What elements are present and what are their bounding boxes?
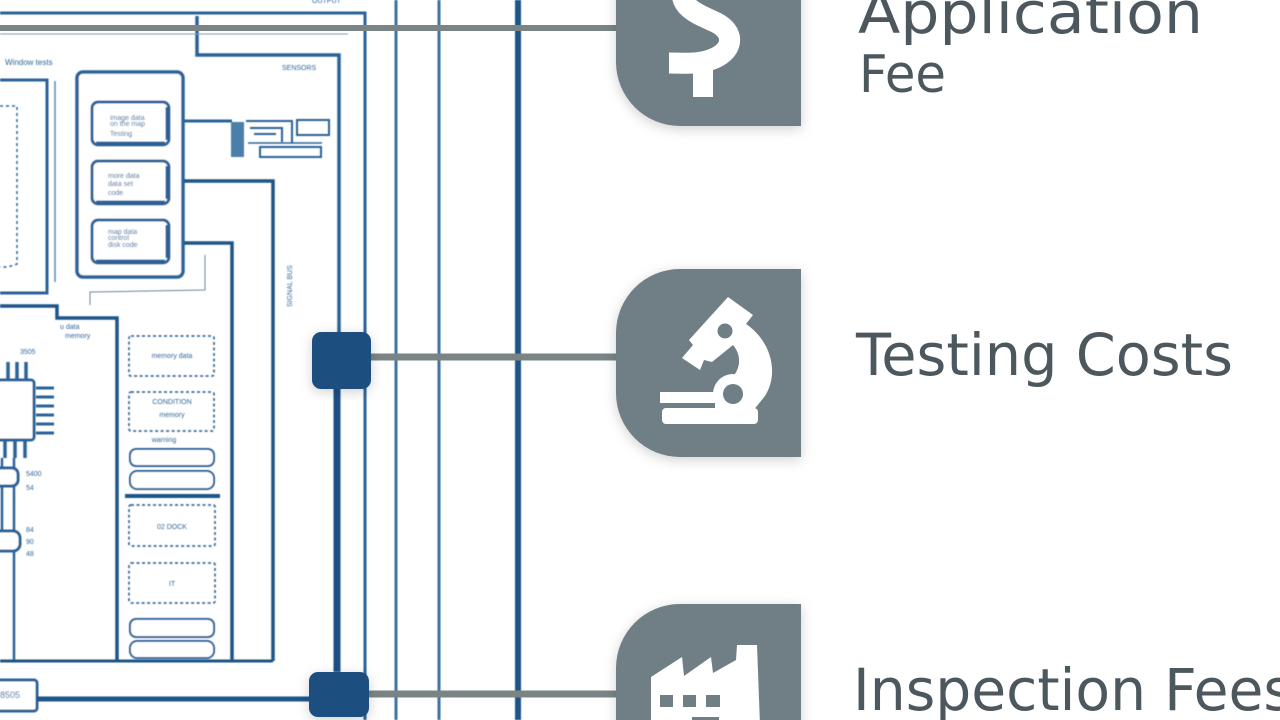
memory block captions: warning — [151, 437, 176, 444]
card 2: code — [108, 190, 123, 197]
memory block captions: memory — [159, 412, 185, 419]
processor chip: 84 — [26, 527, 34, 534]
node connector trunk — [334, 388, 340, 672]
memory block captions: 02 DOCK — [157, 524, 187, 531]
memory block captions — [151, 353, 193, 588]
icon panel: inspection fees — [616, 604, 801, 720]
processor chip — [0, 324, 91, 660]
junction node upper — [312, 332, 371, 389]
controller module with three cards — [77, 72, 183, 277]
label: testing costs: Testing Costs — [855, 321, 1233, 389]
card 2: data set — [108, 181, 133, 188]
grey connector lines — [0, 28, 616, 694]
outer wiring and vertical buses — [0, 0, 518, 720]
card 1: Testing — [110, 131, 132, 138]
card 1: image data — [110, 115, 145, 122]
processor chip: 3505 — [20, 349, 36, 356]
left module frame: Window tests — [5, 58, 53, 67]
circuit schematic — [0, 0, 518, 720]
junction node lower — [309, 672, 369, 717]
processor chip: 90 — [26, 539, 34, 546]
icon panel: testing costs — [616, 269, 801, 457]
card 3: disk code — [108, 242, 138, 249]
card 1: on the map — [110, 121, 145, 128]
icon: dollar sign — [669, 0, 730, 97]
processor chip: 5400 — [26, 471, 42, 478]
left module frame: SENSORS — [282, 65, 317, 72]
memory block captions: IT — [169, 581, 176, 588]
icon: microscope — [660, 297, 772, 424]
card 2: more data — [108, 173, 140, 180]
stacked storage cells — [130, 449, 214, 658]
left module frame — [0, 0, 342, 305]
bottom left terminal and wire: 8505 — [0, 690, 20, 700]
card 2 — [92, 161, 169, 204]
dashed memory blocks — [129, 336, 215, 603]
processor chip: 54 — [26, 485, 34, 492]
processor chip: u data — [60, 324, 80, 331]
icon panel: application fee — [616, 0, 801, 126]
bottom left terminal and wire — [0, 680, 310, 711]
card 3 — [92, 220, 169, 263]
card 3: map data — [108, 229, 137, 236]
memory block captions: CONDITION — [152, 399, 192, 406]
small connector component — [231, 120, 329, 157]
card 3: control — [108, 235, 129, 242]
icon: factory — [651, 645, 760, 720]
processor chip: 48 — [26, 551, 34, 558]
processor chip: memory — [65, 333, 91, 340]
separator bar — [125, 494, 220, 498]
wires from module — [0, 121, 273, 661]
card 1 — [92, 102, 169, 145]
heading: application fee — [858, 0, 1203, 105]
side label: SIGNAL BUS — [287, 265, 294, 307]
heading: application fee: Fee — [859, 45, 946, 105]
memory block captions: memory data — [152, 353, 193, 360]
